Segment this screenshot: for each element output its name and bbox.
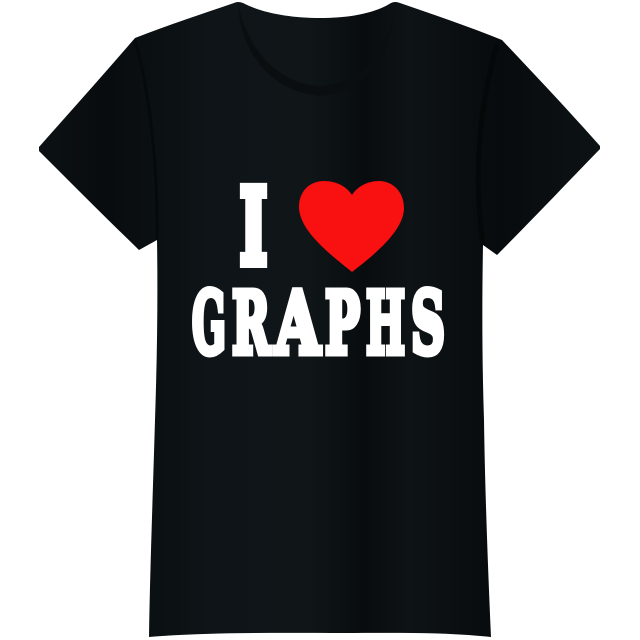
text: GRAPHS: H <box>366 274 405 374</box>
left sleeve seam <box>135 40 157 240</box>
text: GRAPHS: G <box>192 274 226 374</box>
text: I: I <box>240 167 267 288</box>
right sleeve seam <box>478 45 497 245</box>
icon: red heart <box>299 181 404 272</box>
text: GRAPHS: R <box>232 274 271 374</box>
text: GRAPHS <box>192 274 445 374</box>
text: GRAPHS: S <box>411 274 445 374</box>
text: GRAPHS: P <box>325 274 360 374</box>
text: GRAPHS: A <box>274 274 321 374</box>
collar shadow <box>238 4 395 96</box>
